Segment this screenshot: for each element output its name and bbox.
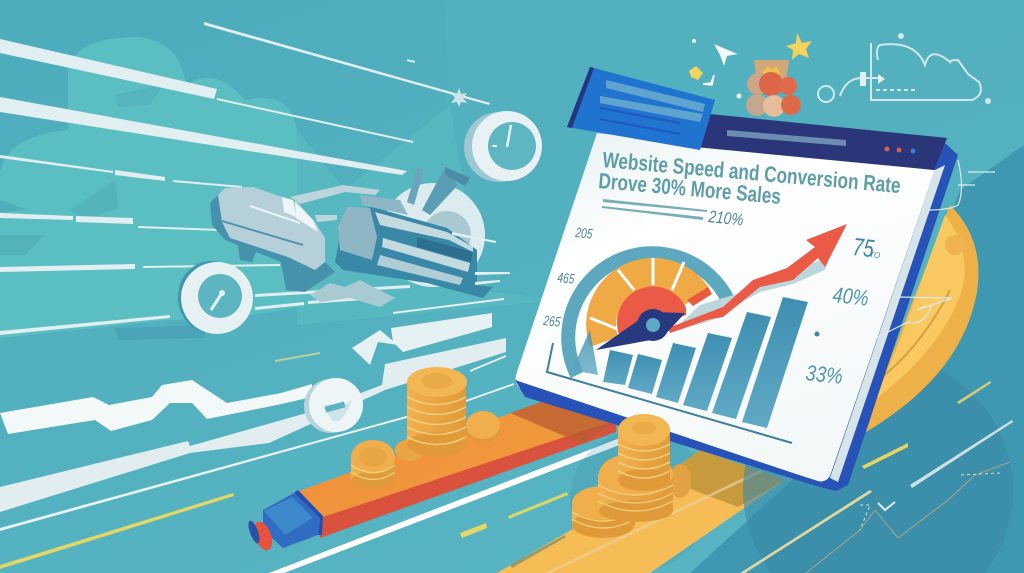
panel sheet [516, 133, 935, 481]
browser header bar [695, 113, 947, 170]
star on speed line [451, 88, 467, 107]
icon: stopwatch clock top [464, 111, 542, 182]
browser panel [515, 67, 958, 491]
yellow road [497, 430, 785, 573]
axis labels: 265 [542, 312, 561, 330]
gold coin stack foreground [572, 414, 691, 538]
icon: speedometer clock left [178, 261, 253, 334]
orange progress bar [246, 402, 616, 553]
background silhouettes [0, 37, 560, 340]
axis labels: 210% [707, 207, 744, 230]
blue tab card [567, 67, 715, 150]
chart axis [547, 343, 792, 443]
car crash illustration [210, 167, 510, 307]
speed streaks mid [275, 313, 514, 402]
icon: stars [689, 33, 812, 98]
thin streaks lower left [0, 415, 622, 573]
wide white band [0, 338, 506, 512]
heading: Website Speed and Conversion Rate [602, 147, 902, 198]
dark chart circle [740, 355, 1013, 573]
small legend dot [814, 332, 820, 336]
axis labels: 75 [851, 233, 875, 263]
gauge [568, 253, 728, 375]
axis labels: 465 [557, 269, 575, 287]
axis labels: 33% [804, 360, 844, 389]
white zigzag line chart [0, 380, 312, 434]
heading: Drove 30% More Sales [598, 168, 782, 209]
axis labels: TO [869, 250, 881, 260]
panel frame blue edge [820, 143, 958, 491]
axis labels [542, 207, 881, 389]
growth arrow [668, 224, 847, 333]
gold coin stacks on bar [351, 367, 500, 488]
gauge needle [596, 309, 685, 350]
heading underline [602, 199, 707, 220]
axis labels: 205 [574, 224, 593, 242]
icon: cloud chart outline [818, 33, 991, 104]
paper clip lines [876, 160, 995, 338]
gold disc behind panel [866, 205, 978, 432]
axis labels: 40% [831, 282, 870, 311]
speed lines top left [0, 22, 504, 335]
icon: clock mid [304, 378, 363, 433]
icon: coin badges [746, 60, 801, 117]
bar chart [572, 297, 808, 428]
